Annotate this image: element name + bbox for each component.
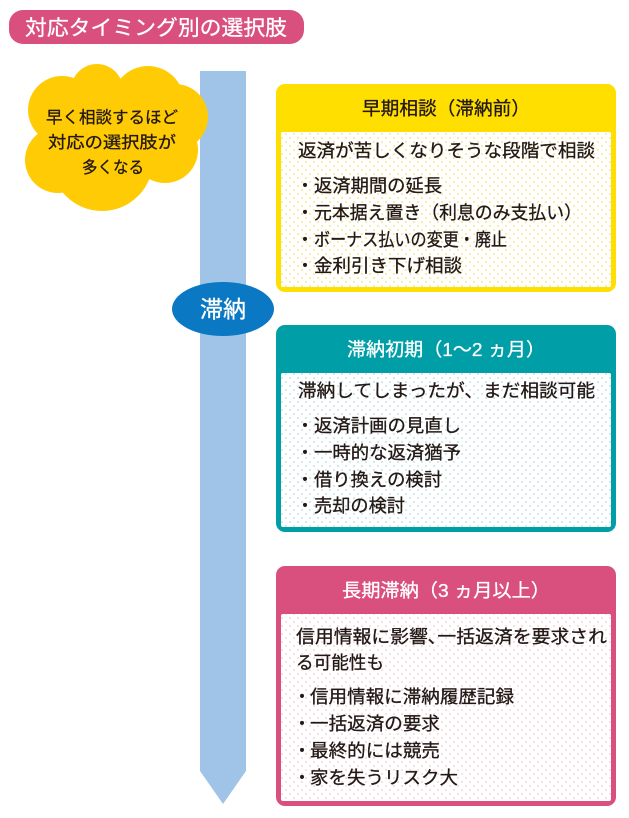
text block: ・: [293, 714, 311, 734]
panel: early delinquency: [276, 325, 616, 532]
text block: 最終的には競売: [310, 741, 440, 761]
text block: 信用情報に影響､一括返済を要求され: [296, 627, 607, 647]
panel: long-term delinquency: [276, 566, 616, 806]
timeline arrow: [200, 71, 246, 804]
text block: 滞納してしまったが、まだ相談可能: [298, 381, 595, 401]
callout: cloud: 対応の選択肢が: [48, 133, 177, 152]
text block: ・: [296, 470, 314, 490]
heading: 早期相談（滞納前）: [362, 98, 530, 119]
heading: 長期滞納（3 ヵ月以上）: [342, 580, 550, 601]
text block: ボーナス払いの変更・廃止: [314, 230, 507, 250]
text block: ・: [296, 416, 314, 436]
text block: 借り換えの検討: [314, 470, 442, 490]
title: [9, 10, 304, 44]
text block: 信用情報に滞納履歴記録: [310, 687, 514, 707]
text block: ・: [296, 256, 314, 276]
text block: 返済が苦しくなりそうな段階で相談: [298, 141, 595, 161]
text block: 一括返済の要求: [310, 714, 440, 734]
text block: [296, 141, 595, 276]
heading: 滞納初期（1～2 ヵ月）: [347, 339, 545, 360]
text block: ・: [296, 443, 314, 463]
text block: ・: [293, 687, 311, 707]
callout: cloud: 早く相談するほど: [46, 108, 178, 127]
text block: ・: [296, 176, 314, 196]
text block: 元本据え置き（利息のみ支払い）: [314, 203, 582, 223]
text block: ・: [296, 230, 314, 250]
text block: [293, 627, 607, 788]
text block: 一時的な返済猶予: [314, 443, 461, 463]
text block: 家を失うリスク大: [310, 768, 458, 788]
text block: ・: [296, 496, 314, 516]
text block: 返済計画の見直し: [314, 416, 461, 436]
label: 滞納 oval: 滞納: [200, 296, 246, 322]
text block: ・: [293, 741, 311, 761]
text block: 売却の検討: [314, 496, 405, 516]
callout: cloud: 多くなる: [82, 158, 144, 177]
text block: ・: [296, 203, 314, 223]
text block: 返済期間の延長: [314, 176, 442, 196]
text block: ・: [293, 768, 311, 788]
text block: [296, 381, 595, 516]
callout: cloud: [25, 64, 208, 211]
title: 対応タイミング別の選択肢: [25, 17, 287, 40]
label: 滞納 oval: [172, 282, 274, 336]
text block: る可能性も: [296, 653, 384, 673]
panel: early consultation: [276, 84, 616, 292]
text block: 金利引き下げ相談: [314, 256, 462, 276]
